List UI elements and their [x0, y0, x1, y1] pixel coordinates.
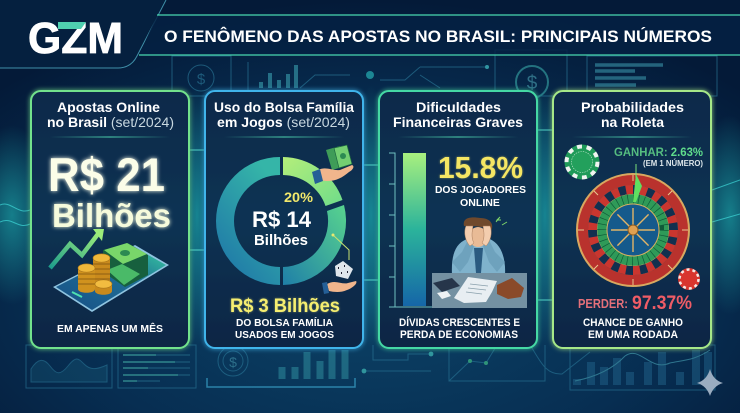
heading	[581, 99, 684, 130]
icon: phone with money and coins	[50, 229, 169, 312]
caption: USADOS EM JOGOS	[235, 329, 334, 341]
lose label: PERDER:	[578, 297, 628, 311]
heading	[393, 99, 523, 130]
divider	[398, 136, 518, 138]
panel frame	[205, 91, 363, 348]
caption	[399, 316, 520, 341]
divider	[50, 136, 170, 138]
caption: DO BOLSA FAMÍLIA	[236, 316, 333, 329]
heading: Financeiras Graves	[393, 114, 523, 130]
caption: CHANCE DE GANHO	[583, 317, 683, 329]
caption: EM APENAS UM MÊS	[57, 322, 163, 335]
heading: no Brasil (set/2024)	[47, 114, 174, 130]
header: title band	[139, 15, 740, 55]
divider	[224, 136, 344, 138]
background: top dashboards	[172, 50, 717, 98]
header: logo panel	[0, 0, 165, 68]
value: R$ 3 Bilhões	[230, 295, 340, 317]
caption: EM UMA RODADA	[588, 329, 678, 341]
pointer	[633, 164, 642, 202]
star mark	[697, 369, 723, 396]
caption	[235, 316, 334, 341]
win label: GANHAR: 2.63%	[614, 145, 703, 159]
heading: Uso do Bolsa Família	[214, 99, 354, 115]
caption: PERDA DE ECONOMIAS	[400, 329, 518, 341]
big number: R$ 21	[48, 148, 165, 201]
panel: bolsa familia	[205, 91, 363, 348]
heading: Probabilidades	[581, 99, 684, 115]
heading	[214, 99, 354, 130]
donut chart	[216, 157, 349, 285]
icon: hand with dice	[322, 261, 356, 294]
panel frame	[379, 91, 537, 348]
heading: Apostas Online	[57, 99, 160, 115]
donut: share: 20%	[284, 189, 314, 205]
donut: unit: Bilhões	[254, 232, 308, 249]
header: logo border	[0, 0, 166, 68]
panel frame	[31, 91, 189, 348]
background: bottom dashboards: $	[229, 354, 237, 370]
heading: Dificuldades	[416, 99, 501, 115]
background: top dashboards: $	[527, 73, 538, 94]
bar chart	[389, 153, 527, 307]
donut: total: R$ 14	[252, 207, 312, 232]
heading: na Roleta	[601, 114, 664, 130]
icon: red chip	[678, 268, 700, 290]
title: O FENÔMENO DAS APOSTAS NO BRASIL: PRINCIPAIS NÚMEROS	[164, 27, 712, 46]
logo: GZM	[28, 14, 123, 63]
icon: stressed person	[432, 217, 527, 308]
win note: (EM 1 NÚMERO)	[643, 159, 703, 168]
heading	[47, 99, 174, 130]
big unit: Bilhões	[52, 197, 171, 234]
header: band lines	[139, 15, 740, 55]
caption: DÍVIDAS CRESCENTES E	[399, 316, 520, 329]
caption	[583, 317, 683, 341]
value: 15.8%	[438, 150, 523, 185]
value label	[435, 184, 526, 209]
icon: green chip	[564, 144, 600, 180]
lose value: 97.37%	[632, 293, 692, 314]
panel: dificuldades	[379, 91, 537, 348]
divider	[572, 136, 692, 138]
background: top dashboards: $	[197, 71, 206, 88]
value label: ONLINE	[460, 197, 500, 209]
heading: em Jogos (set/2024)	[217, 114, 350, 130]
panel: roleta	[553, 91, 711, 348]
icon: hand with money	[312, 145, 353, 184]
panel frame	[553, 91, 711, 348]
panel: apostas online	[31, 91, 189, 348]
roulette wheel	[576, 173, 690, 287]
background glows	[0, 85, 740, 345]
value label: DOS JOGADORES	[435, 184, 526, 196]
background: bottom dashboards	[26, 345, 715, 390]
